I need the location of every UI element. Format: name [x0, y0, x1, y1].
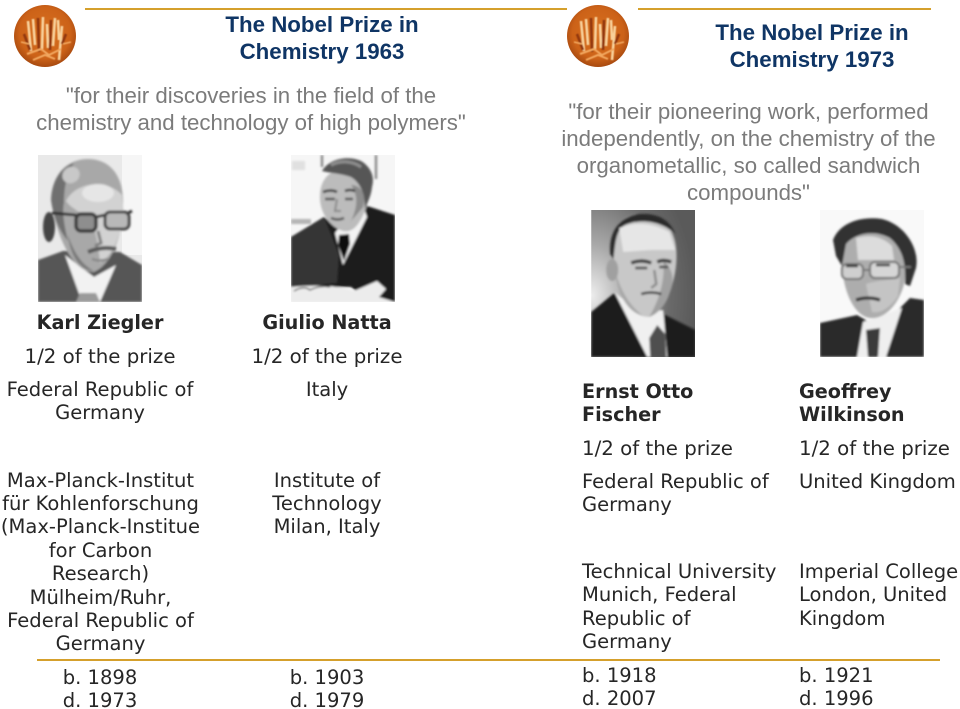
- share: Ziegler: 1/2 of the prize: [25, 344, 175, 368]
- country: Wilkinson: United Kingdom: [799, 470, 956, 492]
- life dates: Ziegler: [63, 666, 137, 709]
- country: Fischer: Germany: [582, 493, 672, 516]
- institution: Natta: Technology: [272, 492, 382, 515]
- life dates: Ziegler: b. 1898: [63, 666, 137, 688]
- name: Karl Ziegler: Karl Ziegler: [37, 311, 163, 334]
- institution: Natta: [272, 468, 382, 538]
- name: Geoffrey Wilkinson: [799, 380, 905, 426]
- country: Natta: Italy: [306, 378, 348, 400]
- motivation quote 1973: [561, 99, 936, 205]
- institution: Ziegler: (Max-Planck-Institue: [1, 515, 200, 538]
- life dates: Fischer: [582, 664, 657, 709]
- share: Natta: 1/2 of the prize: [252, 344, 402, 368]
- institution: Wilkinson: [799, 560, 958, 630]
- icon: Nobel medal 1963: [14, 5, 76, 67]
- institution: Fischer: Republic of: [582, 607, 691, 630]
- country: Ziegler: Germany: [55, 401, 145, 424]
- motivation quote 1963: [36, 83, 466, 135]
- life dates: Natta: [290, 666, 364, 709]
- institution: Fischer: Germany: [582, 630, 672, 653]
- institution: Ziegler: Mülheim/Ruhr,: [30, 586, 171, 609]
- institution: Ziegler: for Carbon: [49, 539, 152, 562]
- institution: Ziegler: [1, 468, 200, 655]
- name: Ernst Otto Fischer: Ernst Otto: [582, 380, 693, 403]
- country: Ziegler: Federal Republic of: [7, 378, 193, 400]
- country: Fischer: Federal Republic of: [582, 470, 769, 492]
- country: Ziegler: [7, 378, 194, 424]
- institution: Wilkinson: London, United: [799, 583, 947, 606]
- share: Fischer: 1/2 of the prize: [582, 436, 733, 460]
- portrait: Giulio Natta: [291, 155, 395, 302]
- name: Ernst Otto Fischer: [582, 380, 693, 426]
- institution: Ziegler: Max-Planck-Institut: [7, 468, 194, 492]
- portrait: Ernst Otto Fischer: [591, 210, 695, 357]
- name: Geoffrey Wilkinson: Geoffrey: [799, 380, 891, 403]
- motivation quote 1973: "for their pioneering work, performed: [568, 99, 929, 124]
- motivation quote 1973: compounds": [687, 180, 810, 205]
- heading 1963: [225, 12, 419, 64]
- heading 1963: Chemistry 1963: [240, 39, 404, 64]
- motivation quote 1973: independently, on the chemistry of the: [561, 126, 936, 151]
- institution: Wilkinson: Imperial College: [799, 560, 958, 583]
- institution: Ziegler: für Kohlenforschung: [2, 492, 199, 515]
- name: Ernst Otto Fischer: Fischer: [582, 403, 661, 426]
- motivation quote 1963: chemistry and technology of high polymers": [36, 110, 466, 135]
- heading 1973: [715, 20, 909, 72]
- institution: Wilkinson: Kingdom: [799, 607, 885, 630]
- institution: Fischer: [582, 560, 776, 653]
- panel: Nobel Prize in Chemistry 1963: [1, 5, 567, 709]
- top rule 1963: [85, 8, 567, 10]
- institution: Natta: Milan, Italy: [274, 515, 380, 538]
- name: Geoffrey Wilkinson: Wilkinson: [799, 403, 905, 426]
- share: Wilkinson: 1/2 of the prize: [799, 436, 950, 460]
- life dates: Wilkinson: b. 1921: [799, 664, 874, 686]
- motivation quote 1963: "for their discoveries in the field of the: [66, 83, 436, 108]
- top rule 1973: [638, 8, 931, 10]
- heading 1973: The Nobel Prize in: [715, 20, 909, 45]
- institution: Fischer: Technical University: [582, 560, 776, 583]
- institution: Ziegler: Federal Republic of: [7, 609, 194, 632]
- country: Fischer: [582, 470, 770, 516]
- heading 1973: Chemistry 1973: [730, 47, 894, 72]
- life dates: Wilkinson: [799, 664, 874, 709]
- icon: Nobel medal 1973: [567, 5, 629, 67]
- institution: Ziegler: Germany: [56, 632, 145, 655]
- institution: Natta: Institute of: [274, 468, 380, 492]
- institution: Ziegler: Research): [52, 562, 149, 585]
- name: Giulio Natta: Giulio Natta: [262, 311, 392, 334]
- life dates: Fischer: b. 1918: [582, 664, 657, 686]
- portrait: Geoffrey Wilkinson: [820, 216, 924, 357]
- heading 1963: The Nobel Prize in: [225, 12, 419, 37]
- portrait: Karl Ziegler: [38, 155, 142, 302]
- bottom rule: [37, 659, 940, 661]
- motivation quote 1973: organometallic, so called sandwich: [577, 153, 920, 178]
- institution: Fischer: Munich, Federal: [582, 583, 737, 606]
- life dates: Natta: b. 1903: [290, 666, 364, 688]
- panel: Nobel Prize in Chemistry 1973: [561, 5, 958, 709]
